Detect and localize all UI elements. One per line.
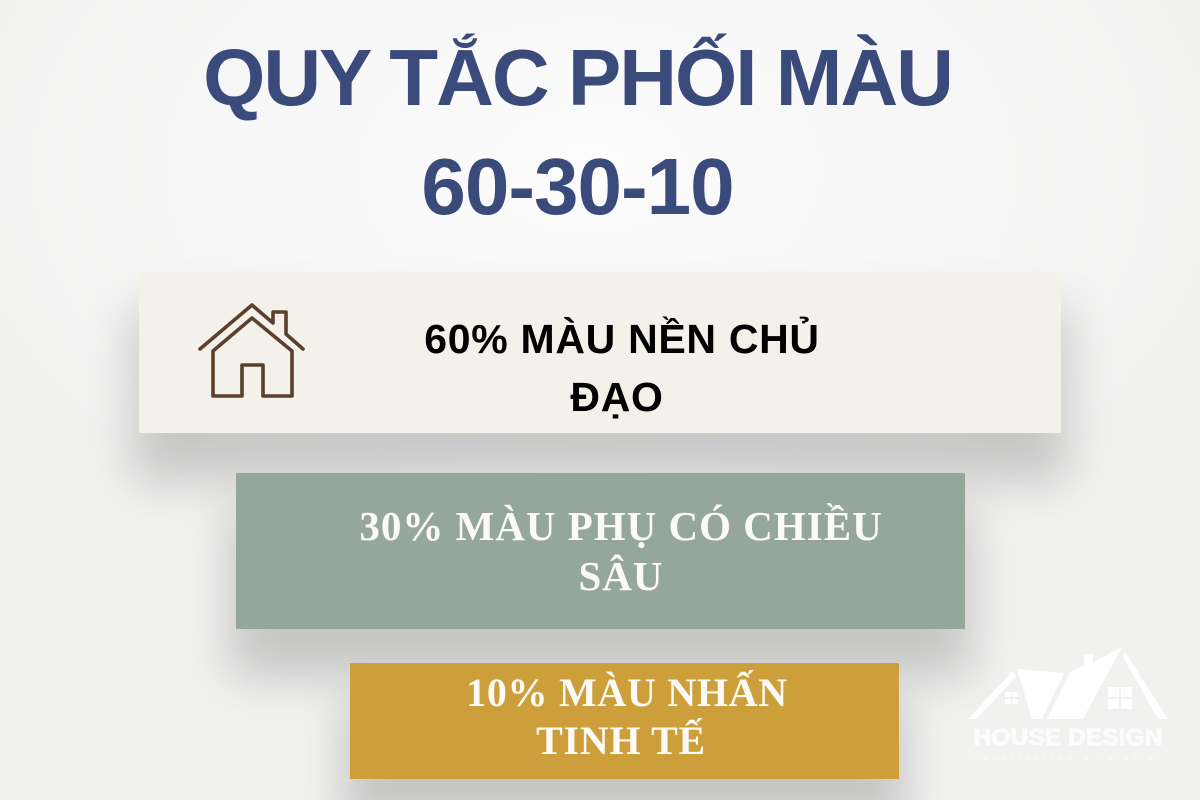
logo: House Design [968,648,1168,762]
icon: house [198,303,305,398]
panel: 30% secondary colour [236,473,965,629]
logo: House Design: construction & interior [974,753,1160,762]
text: 10% label [466,670,788,763]
text: 10% label: 10% MÀU NHẤN [466,670,788,715]
panel: 10% accent colour [350,663,899,779]
text: 60% label: ĐẠO [570,374,664,420]
title: QUY TẮC PHỐI MÀU [203,33,952,122]
panel: 60% base colour [139,272,1061,433]
text: 60% label: 60% MÀU NỀN CHỦ [424,316,820,362]
title [203,33,952,231]
text: 60% label [424,316,820,420]
text: 30% label [359,503,883,599]
logo: House Design: HOUSE DESIGN [974,724,1162,750]
text: 30% label: 30% MÀU PHỤ CÓ CHIỀU [359,503,883,549]
title: 60-30-10 [421,142,734,231]
text: 30% label: SÂU [578,553,664,599]
text: 10% label: TINH TẾ [536,718,706,763]
